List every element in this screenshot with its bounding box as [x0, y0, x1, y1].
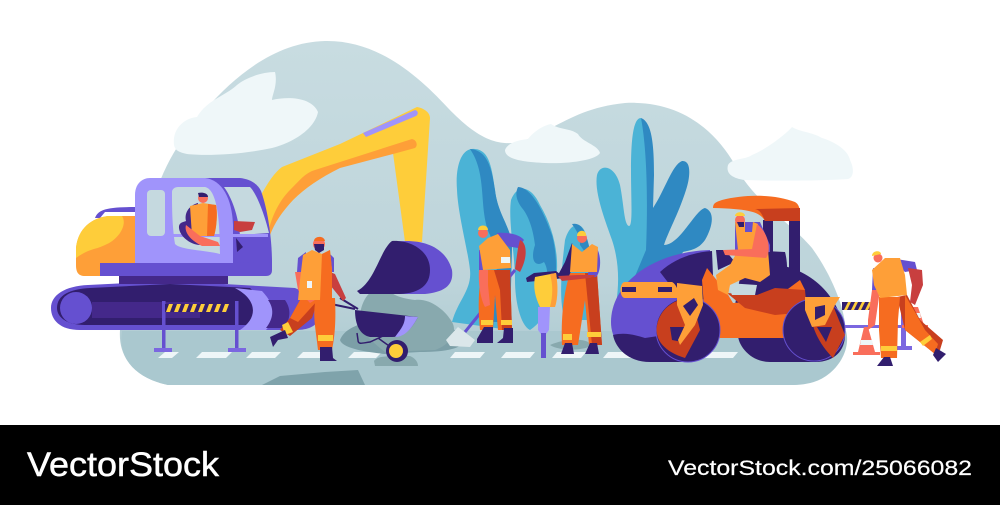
worker with wheelbarrow — [270, 237, 418, 362]
worker 1 head — [313, 237, 325, 253]
roller body — [702, 268, 807, 338]
barrier right — [842, 302, 912, 350]
worker 3 head — [577, 231, 587, 243]
wheelbarrow — [307, 298, 418, 362]
worker with shovel — [446, 226, 526, 347]
worker 2 body — [479, 233, 526, 307]
roller grille — [620, 282, 680, 298]
roller front drum — [611, 250, 714, 362]
jackhammer — [526, 271, 565, 358]
watermark footer — [0, 425, 1000, 505]
worker 4 head — [872, 251, 882, 262]
worker 1 legs — [270, 298, 337, 361]
road band — [121, 331, 847, 385]
worker 3 legs and boots — [561, 273, 602, 354]
excavator — [51, 107, 452, 352]
worker 2 head — [478, 226, 488, 238]
worker with jackhammer — [526, 231, 602, 358]
worker 3 body — [558, 243, 600, 281]
excavator boom — [260, 107, 430, 242]
excavator bucket — [357, 241, 452, 294]
roller front wheel — [656, 283, 720, 362]
excavator lower body — [100, 263, 272, 284]
roller canopy and posts — [713, 196, 800, 285]
clouds — [174, 72, 853, 181]
excavator operator — [179, 193, 220, 246]
footer logo text: VectorStock — [27, 446, 220, 484]
shovel — [446, 270, 515, 347]
roller driver — [716, 212, 770, 295]
plant left — [452, 149, 512, 330]
roller rear wheel — [783, 297, 845, 361]
roller rear drum — [738, 264, 845, 362]
shadow — [550, 340, 590, 350]
plant right light — [596, 118, 647, 323]
road dashes — [158, 352, 738, 358]
worker 4 legs and boots — [877, 295, 946, 366]
plant small — [561, 225, 592, 320]
rock pile — [340, 288, 465, 366]
worker 1 body — [295, 250, 346, 303]
roller seat — [735, 250, 787, 305]
excavator cab — [135, 178, 272, 263]
worker 4 body — [868, 258, 923, 330]
mound on road — [262, 370, 365, 385]
excavator track — [51, 281, 318, 330]
plants — [452, 118, 712, 330]
plant middle — [510, 189, 557, 330]
road roller — [611, 196, 845, 362]
barrier left — [154, 301, 246, 352]
excavator engine — [76, 207, 135, 276]
worker 2 legs and boots — [477, 270, 513, 343]
plant right dark — [620, 118, 712, 325]
footer url text: VectorStock.com/25066082 — [668, 457, 972, 480]
background blob — [120, 41, 847, 385]
cone left — [853, 327, 880, 355]
cone right — [902, 307, 928, 328]
worker with cones — [853, 251, 946, 366]
